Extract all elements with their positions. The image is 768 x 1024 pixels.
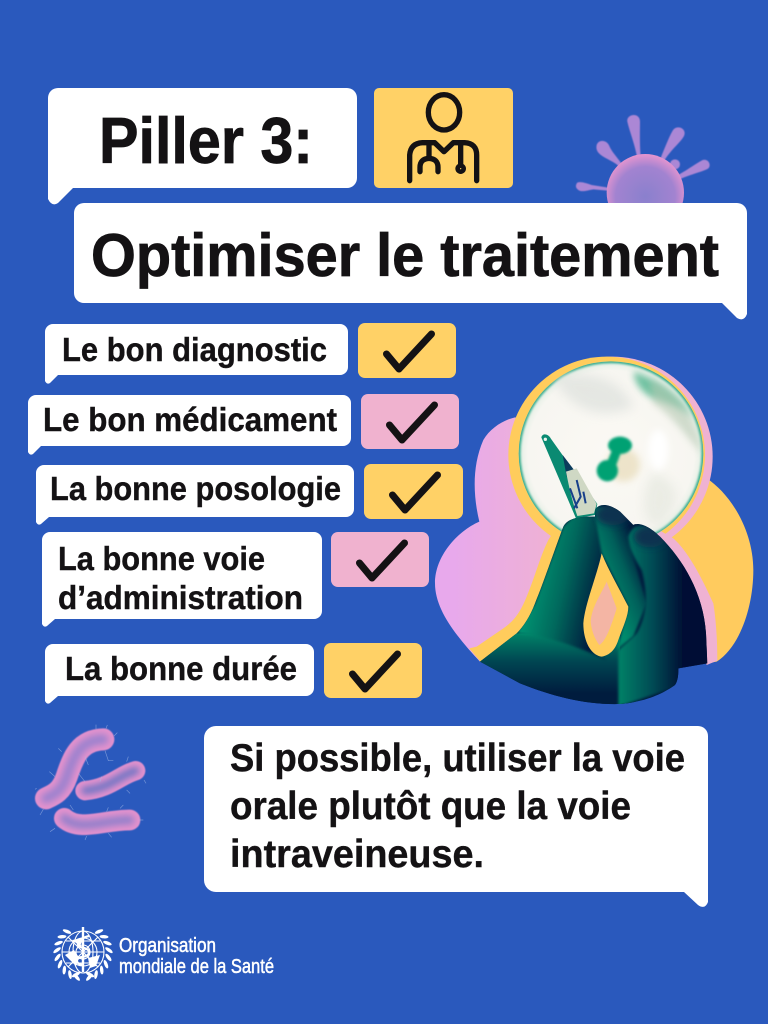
check tile: yellow [358, 323, 456, 378]
speech bubble: Optimiser le traitement [74, 203, 747, 319]
icon: virus [576, 115, 710, 231]
glove [480, 505, 708, 704]
checklist item: La bonne voie d'administration [42, 532, 322, 627]
icon: bacteria [35, 725, 146, 840]
check tile: yellow [364, 464, 463, 519]
vial [541, 434, 597, 518]
checklist item: La bonne durée [45, 644, 314, 704]
logo: WHO emblem [52, 927, 114, 982]
heading: Piller 3: Piller 3: [99, 104, 313, 177]
heading: Optimiser le traitement: Optimiser le traitement [91, 222, 719, 289]
checklist item: La bonne durée: La bonne durée [65, 650, 297, 687]
check tile: yellow [324, 643, 422, 698]
speech bubble: Piller 3 [48, 88, 357, 204]
logo text: Organisation mondiale de la Santé [119, 935, 274, 978]
check tile: pink [361, 394, 459, 449]
checklist item: Le bon médicament: Le bon médicament [43, 401, 337, 438]
icon: doctor on yellow tile [374, 88, 513, 188]
checklist item: La bonne posologie [36, 465, 354, 525]
checklist item: La bonne posologie: La bonne posologie [50, 470, 341, 507]
checklist item: Le bon médicament [28, 395, 351, 455]
speech bubble: recommendation: Si possible, utiliser la voie [230, 737, 685, 780]
logo text: Organisation mondiale de la Santé: mondiale de la Santé [119, 956, 274, 978]
checklist item: Le bon diagnostic: Le bon diagnostic [62, 331, 327, 368]
illustration: gloved hand holding a vial [435, 357, 753, 710]
logo text: Organisation mondiale de la Santé: Organisation [119, 935, 216, 957]
checklist item: La bonne voie d'administration: d’administration [58, 579, 303, 616]
check tile: pink [331, 532, 429, 587]
checklist item: Le bon diagnostic [45, 324, 348, 384]
speech bubble: recommendation: intraveineuse. [230, 833, 484, 876]
checklist item: La bonne voie d'administration: La bonne voie [58, 540, 265, 577]
speech bubble: recommendation [204, 726, 708, 907]
speech bubble: recommendation: orale plutôt que la voie [230, 785, 631, 828]
